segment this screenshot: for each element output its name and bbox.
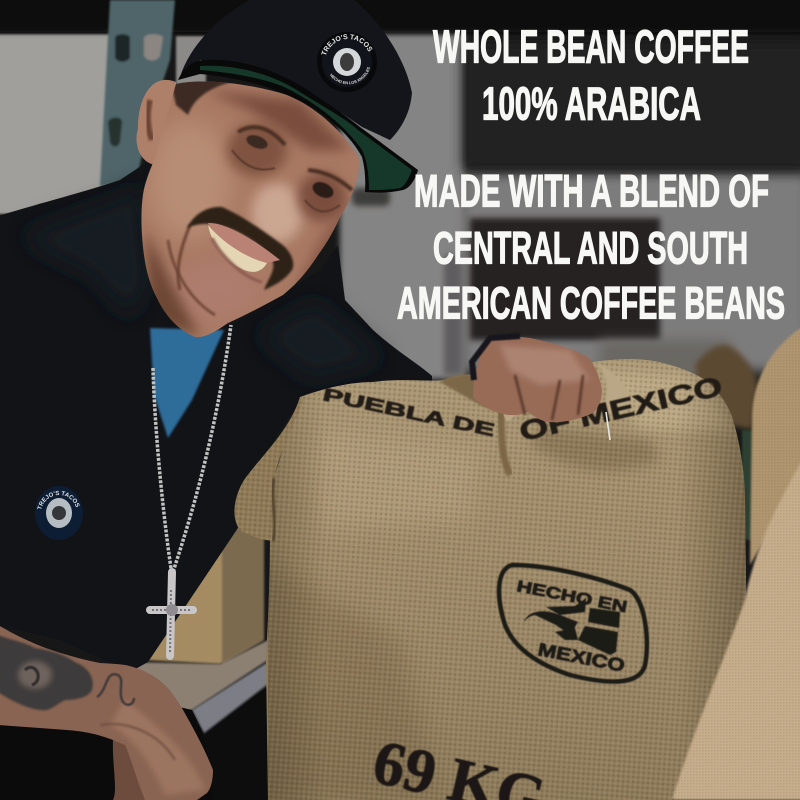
hair: [172, 82, 231, 116]
sleeve patch: [35, 486, 83, 540]
gathered cloth by the hand: [440, 374, 505, 415]
eagle: [524, 598, 620, 655]
metal shelf upright: [100, 0, 175, 186]
blue t-shirt: [150, 328, 224, 438]
right sacks, background: [742, 325, 800, 565]
burlap sack: [234, 350, 750, 800]
right sack, foreground: [672, 455, 800, 800]
eyes: [246, 134, 268, 150]
hand gripping sack: [472, 336, 602, 422]
ear: [137, 80, 180, 165]
tattooed forearm and hand: [0, 625, 213, 800]
wrinkles: [168, 240, 215, 315]
head and face: [141, 78, 360, 337]
sack top stencil: OF MEXICO: [517, 371, 725, 447]
sack top stencil: PUEBLA DE: [321, 384, 497, 440]
cap patch: [317, 32, 377, 92]
watch band: [472, 336, 520, 380]
man: black shirt: [0, 160, 432, 800]
chain and cross necklace: [150, 325, 231, 656]
moustache: [187, 207, 293, 290]
stamp: hecho en mexico: MEXICO: [536, 639, 626, 676]
cap patch: TREJO'S TACOS: [321, 34, 372, 54]
mouth: lip and teeth: [208, 223, 280, 263]
cardboard box and shelf: [130, 525, 268, 800]
black cap with green brim: [178, 0, 418, 193]
eye sockets: [227, 124, 287, 176]
sack top stencil: [321, 371, 725, 447]
text block: blend description: [397, 166, 785, 328]
tattoo: [0, 635, 93, 710]
cap patch: HECHO EN LOS ANGELES: [330, 67, 370, 84]
heading: whole bean coffee: [433, 20, 749, 130]
sack side flap: [234, 397, 303, 541]
stamp: hecho en mexico: [499, 565, 647, 682]
sleeve patch: TREJO'S TACOS: [37, 490, 80, 509]
stamp: hecho en mexico: HECHO EN: [515, 578, 628, 616]
